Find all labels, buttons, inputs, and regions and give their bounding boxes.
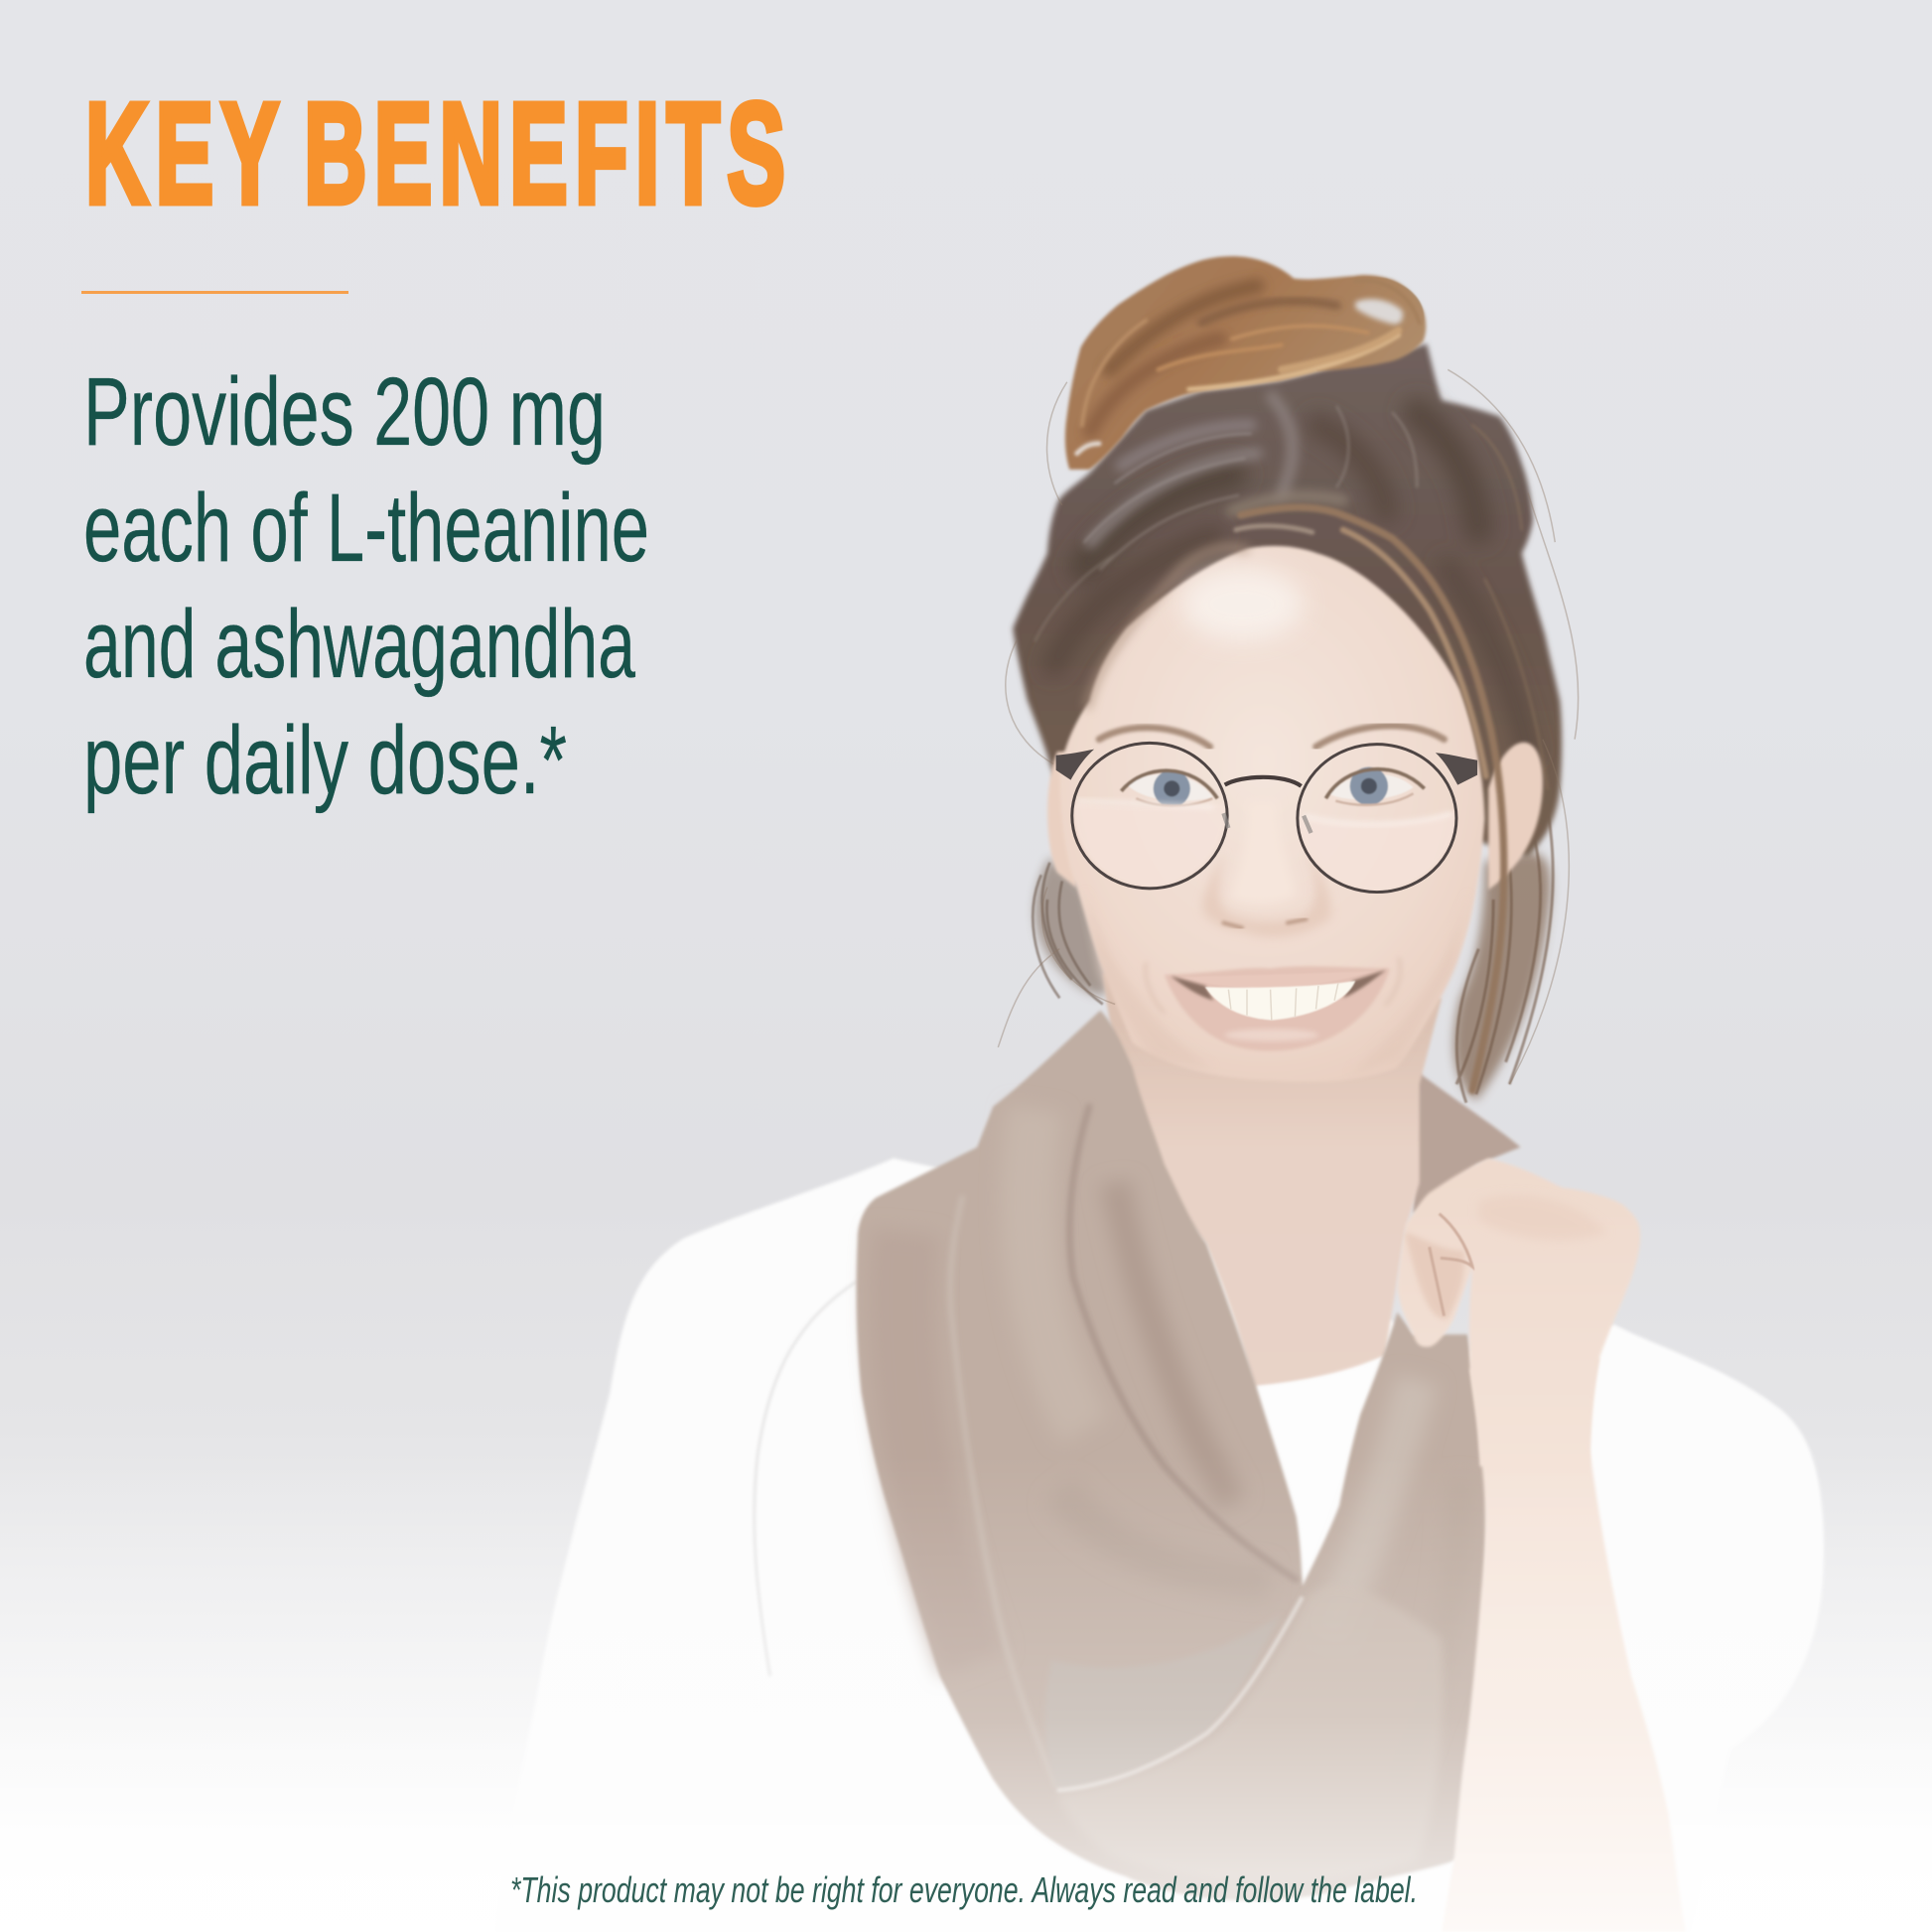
scarf main drape <box>857 1011 1488 1900</box>
bridge <box>1225 777 1302 786</box>
eyebrows <box>1099 726 1445 747</box>
forearm <box>1442 1358 1686 1932</box>
hair wisps <box>998 369 1579 1084</box>
hair texture <box>1035 397 1548 788</box>
nostrils <box>1223 919 1307 928</box>
nose pads <box>1223 813 1311 833</box>
scarf inner hollow <box>1045 1614 1282 1789</box>
left ear <box>1047 752 1090 888</box>
mouth dark corners <box>1171 970 1386 1001</box>
right temple wedge <box>1436 753 1477 785</box>
scarf fold lines <box>950 1107 1297 1785</box>
left temple wedge <box>1056 750 1094 780</box>
tooth lines <box>1228 983 1338 1021</box>
bun back loop <box>1282 277 1424 371</box>
left eye <box>1121 770 1217 807</box>
scarf soft shading <box>902 1109 1460 1787</box>
scarf back behind neck <box>1414 1069 1521 1213</box>
body line 1: Provides 200 mg <box>83 357 606 466</box>
neck <box>1103 973 1442 1387</box>
back hair right <box>1453 788 1553 1103</box>
scarf lower drape <box>1057 1586 1444 1883</box>
scarf <box>857 1011 1488 1900</box>
body text <box>83 357 649 814</box>
body line 4: per daily dose.* <box>83 706 567 814</box>
lens reflections <box>1074 803 1455 891</box>
eyes <box>1121 767 1425 807</box>
lens glare band <box>1077 801 1451 824</box>
right ear <box>1488 743 1543 890</box>
hair highlights <box>1090 397 1343 542</box>
bun gap <box>1355 299 1403 325</box>
hair bun <box>1065 256 1426 470</box>
white t-shirt collar <box>1254 1358 1383 1578</box>
main hair <box>1013 344 1562 857</box>
bottom fade <box>0 1453 1932 1932</box>
hand <box>1397 1159 1640 1466</box>
white shirt <box>495 1159 1824 1932</box>
bun strands <box>1077 280 1420 454</box>
scarf front drape edge <box>1057 1596 1303 1790</box>
glasses <box>1056 743 1477 893</box>
side hair strand <box>1236 507 1504 1090</box>
teeth <box>1205 981 1355 1021</box>
finger creases <box>1430 1213 1472 1315</box>
cheek shading <box>1084 888 1468 1074</box>
body line 3: and ashwagandha <box>83 590 635 698</box>
fist <box>1397 1159 1640 1466</box>
mouth <box>1165 966 1390 1051</box>
left lens <box>1072 743 1227 889</box>
upper lip <box>1176 971 1378 988</box>
knuckle shading <box>1478 1195 1608 1240</box>
back hair left mass <box>1035 858 1109 995</box>
lower lip highlight <box>1225 1029 1318 1041</box>
right eye <box>1325 767 1425 805</box>
right lens <box>1298 745 1456 893</box>
lips <box>1165 966 1390 1051</box>
nose <box>1202 801 1331 937</box>
divider line <box>81 291 348 294</box>
back hair right mass <box>1453 853 1551 1100</box>
back hair left strands <box>1033 863 1103 1004</box>
hand shading <box>1405 1232 1464 1319</box>
back hair left <box>1033 858 1109 1004</box>
footnote: *This product may not be right for everyone. Always read and follow the label. <box>510 1869 1418 1910</box>
smile creases <box>1146 957 1400 1013</box>
body line 2: each of L-theanine <box>83 474 649 582</box>
hair dark masses <box>1053 413 1528 752</box>
face <box>1059 546 1485 1082</box>
hair fine strands <box>1035 407 1548 788</box>
nose side shadow <box>1202 850 1331 937</box>
soft hairline shadow <box>1087 547 1248 709</box>
forehead highlight <box>1180 567 1304 640</box>
title: KEY BENEFITS <box>85 74 792 233</box>
back hair right strands <box>1456 788 1553 1103</box>
nose highlight <box>1230 801 1297 904</box>
